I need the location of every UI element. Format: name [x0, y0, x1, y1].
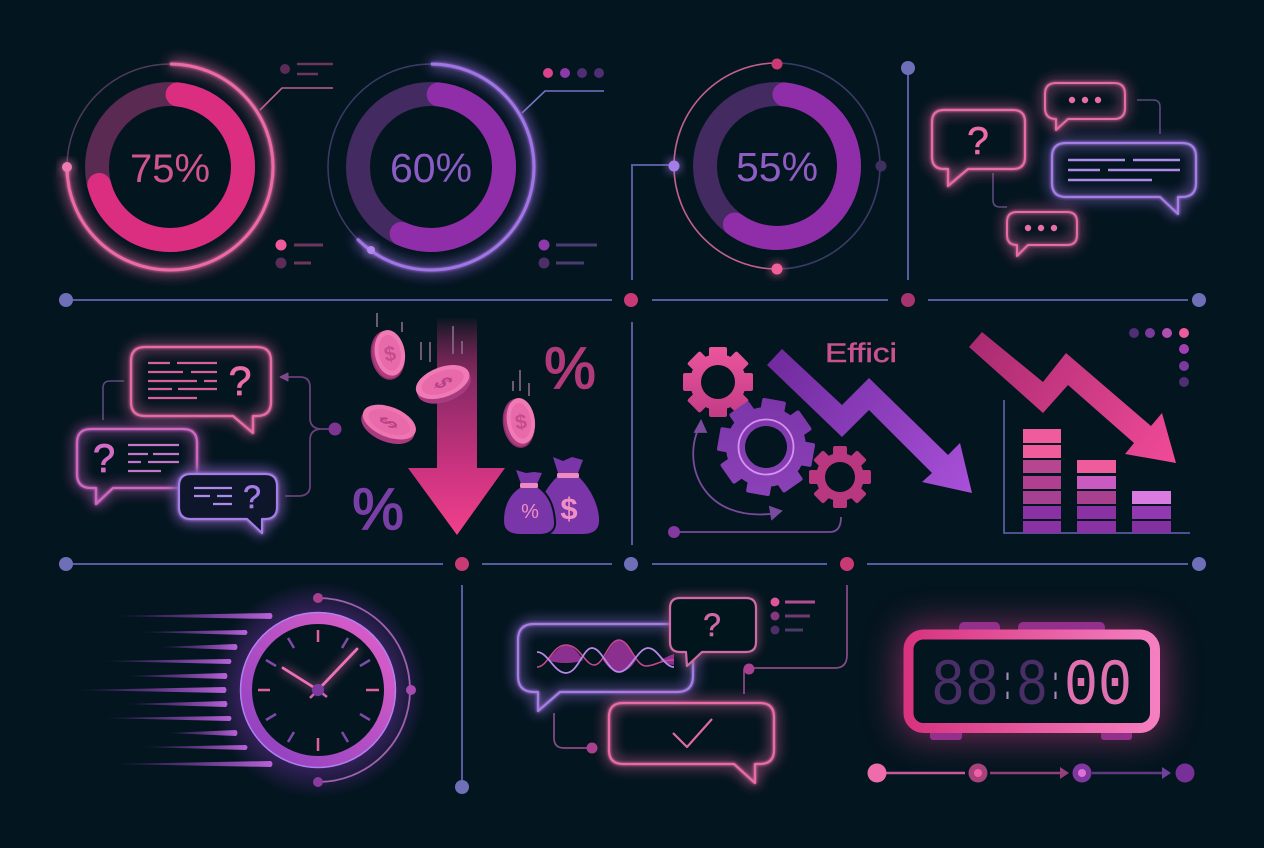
icon: coin 1 [368, 328, 409, 382]
panel: 75% donut [62, 64, 273, 270]
bubble: question [670, 598, 756, 666]
icon: percent money bag [503, 470, 555, 535]
timer digits: : [1002, 658, 1013, 715]
timer body [908, 634, 1155, 728]
percent sign: top right: % [544, 336, 596, 401]
panel: 60% donut [328, 64, 534, 270]
chart axes [1004, 400, 1190, 533]
grid connector lines [59, 61, 1206, 794]
icon: dollar money bag [537, 457, 599, 534]
percent sign: bottom left: % [352, 477, 404, 542]
timer digits: 8 [1016, 649, 1048, 724]
arrow: purple decline [767, 349, 972, 493]
dots: typing bottom [1025, 225, 1057, 231]
icon: coin 4: $ [514, 410, 529, 435]
timer digits: 88 [931, 649, 999, 724]
bubble: check [609, 703, 774, 783]
legend: 75% donut [260, 64, 333, 268]
text lines: medium bubble [128, 445, 179, 471]
clock glow [210, 582, 426, 798]
progress track [868, 764, 1194, 782]
word: Effici: Effici [825, 338, 897, 368]
bubble: question [932, 110, 1025, 186]
timer buttons and feet [930, 622, 1132, 740]
icon: purple gear [717, 398, 815, 496]
question mark: ? [703, 607, 721, 643]
bubble: typing top [1045, 83, 1125, 130]
text lines: large pink bubble [148, 363, 217, 398]
bar 2 [1077, 460, 1116, 533]
question mark: ? [967, 120, 989, 163]
question mark: large pink bubble: ? [229, 358, 251, 404]
panel: top right speech bubbles [932, 83, 1196, 256]
dot pattern [1129, 328, 1189, 387]
process baseline [668, 517, 841, 538]
icon: dollar money bag: $ [560, 491, 578, 526]
timer digits: 00 [1064, 649, 1132, 724]
icon: coin 2 [411, 358, 476, 410]
icon: percent money bag: % [521, 501, 539, 523]
panel: 55% donut [668, 58, 886, 274]
panel: middle left speech bubbles [77, 347, 342, 533]
icon: pink gear [683, 347, 753, 417]
timer glow [900, 625, 1164, 737]
icon: check mark [673, 719, 712, 747]
icon: coin 3: $ [374, 413, 405, 433]
clock face [240, 612, 396, 768]
bar 1 [1023, 429, 1061, 533]
icon: small magenta gear [809, 446, 871, 508]
text lines: small bubble [194, 488, 232, 504]
bubble: purple waveform [518, 624, 693, 711]
clock hands [283, 649, 357, 690]
icon: coin 1: $ [382, 342, 398, 367]
bubble: purple text [1052, 143, 1196, 214]
icon: coin 4 [500, 396, 538, 449]
panel: efficiency gears [668, 335, 972, 538]
list legend [770, 598, 815, 634]
timer digits: : [1050, 658, 1061, 715]
orbit arc with dots [313, 593, 416, 787]
panel: bottom speech bubbles [518, 585, 847, 783]
icon: coin 3 [356, 398, 421, 451]
panel: declining bar chart [969, 328, 1190, 533]
timer digits [931, 649, 1132, 724]
panel: falling money [352, 313, 599, 542]
bar 3 [1132, 491, 1171, 533]
speed lines [77, 613, 272, 767]
dots: typing top [1069, 97, 1101, 103]
label: 60 percent: 60% [390, 145, 472, 191]
bubble: typing bottom [1007, 212, 1077, 256]
panel: digital timer [900, 622, 1164, 740]
icon: down arrow [408, 318, 505, 535]
icon: coin 2: $ [427, 374, 459, 393]
question mark: medium bubble: ? [93, 437, 115, 481]
arrow: circular process [693, 421, 781, 519]
bubble: medium magenta [77, 429, 197, 504]
label: 55 percent: 55% [736, 144, 818, 190]
waveform [537, 640, 674, 673]
text lines: purple bubble [1068, 160, 1180, 180]
bubble: small purple [179, 474, 277, 533]
motion lines [377, 313, 529, 396]
arrow: pink decline [969, 332, 1176, 463]
legend: 60% donut [522, 68, 604, 268]
label: 75 percent: 75% [130, 147, 210, 191]
panel: fast clock [77, 582, 426, 798]
bubble: large pink [131, 347, 271, 433]
question mark: small bubble: ? [243, 479, 261, 515]
